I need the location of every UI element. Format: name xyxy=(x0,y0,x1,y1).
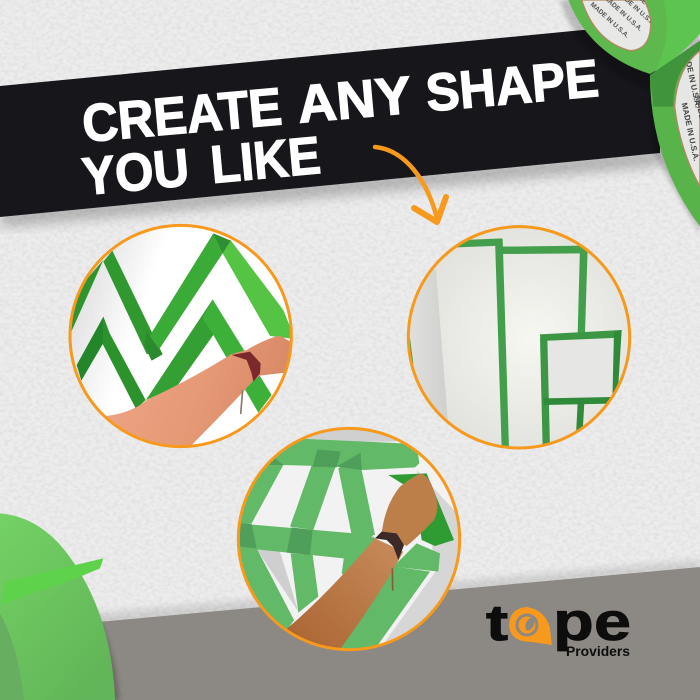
upper grey strip xyxy=(306,430,397,442)
title xyxy=(80,49,601,207)
roll 1 label xyxy=(590,0,651,38)
title line 2: YOU xyxy=(80,138,192,207)
shadowed wall xyxy=(385,470,458,642)
tape overlap at apex xyxy=(213,233,231,253)
bracelet xyxy=(375,532,404,591)
tape: lower zigzag right xyxy=(203,299,272,413)
tape: lower zigzag up xyxy=(146,299,223,400)
roll 2 body xyxy=(650,41,700,227)
roll 1 label: MADE IN U.S.A. xyxy=(579,18,620,56)
title line 1 xyxy=(80,49,601,154)
tape: upper zigzag right xyxy=(223,239,290,338)
shadow in lower window xyxy=(257,549,298,612)
roll 2 core xyxy=(675,51,700,187)
roll 1 label: MADE IN U.S.A. xyxy=(589,1,630,40)
tape: upper zigzag down xyxy=(103,251,163,354)
chevron wall xyxy=(72,227,290,444)
logo letter t: t xyxy=(486,595,508,651)
title line 1: CREATE xyxy=(80,77,284,154)
criss-cross wall xyxy=(252,442,454,644)
roll: bottom left tape xyxy=(0,513,120,700)
orange ring xyxy=(408,227,630,448)
tape: upper zigzag up xyxy=(144,233,230,361)
title line 1: SHAPE xyxy=(423,49,601,123)
arrow xyxy=(375,147,446,222)
tape overlap at fold xyxy=(144,332,163,361)
title line 2 xyxy=(80,126,323,207)
hand xyxy=(382,473,437,546)
dark tape being applied xyxy=(388,473,454,546)
roll inner edge xyxy=(0,613,24,700)
photo circle: chevron zigzag xyxy=(63,220,297,453)
logo: Tape Providers xyxy=(486,592,631,659)
logo word Providers: Providers xyxy=(566,644,630,659)
tape lines xyxy=(408,238,622,448)
tape: far left strip xyxy=(72,260,104,332)
tape: lower zigzag down xyxy=(103,317,146,409)
white inner panel xyxy=(548,340,582,384)
corner shadow wall xyxy=(420,270,448,420)
roll shadow xyxy=(83,590,120,700)
bracelet xyxy=(232,352,261,414)
roll 2 label xyxy=(682,62,700,161)
grey floor xyxy=(0,560,700,700)
tape overlaps xyxy=(240,449,362,555)
roll 1 core xyxy=(582,0,651,51)
logo letters pe: pe xyxy=(553,592,631,652)
room wall xyxy=(434,228,628,446)
orange ring xyxy=(70,225,291,447)
photo circle: criss-cross tape xyxy=(233,423,467,657)
roll 1 body xyxy=(568,0,700,74)
title line 1: ANY xyxy=(295,66,414,135)
roll body xyxy=(0,513,115,700)
tape flap xyxy=(0,558,103,605)
logo tape icon xyxy=(509,607,552,645)
photo circle: rectangles xyxy=(403,222,637,455)
tape: lower zigzag left xyxy=(77,317,109,381)
roll: top right tapes xyxy=(560,0,700,233)
orange ring xyxy=(238,428,460,650)
arm xyxy=(287,538,404,648)
title line 2: LIKE xyxy=(208,126,323,195)
arm xyxy=(106,336,290,446)
tape pieces xyxy=(233,438,440,653)
roll shadow xyxy=(560,0,700,233)
black banner xyxy=(0,30,660,226)
